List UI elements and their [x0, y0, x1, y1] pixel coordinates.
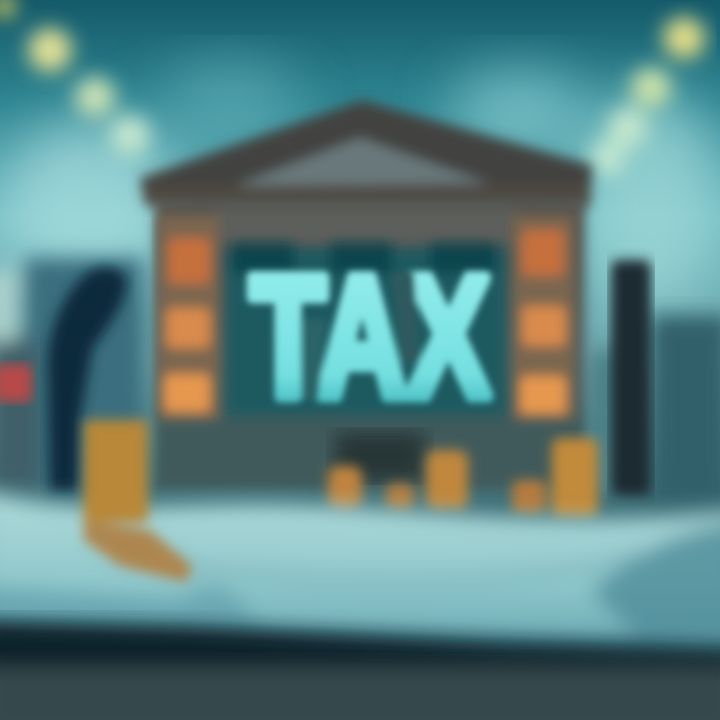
coin stacks: front of building	[328, 438, 598, 518]
background: sky glow	[0, 60, 720, 310]
skyline: left buildings	[0, 258, 144, 490]
skyline: right buildings	[590, 315, 720, 505]
right pillar with orange panels	[512, 215, 574, 420]
building roof pediment	[140, 100, 592, 206]
dark entrance behind sign	[226, 243, 506, 416]
lower building shadow	[335, 432, 425, 480]
string lights: left	[0, 0, 150, 156]
ground: pale document surface	[0, 490, 720, 645]
dark tower: right	[611, 260, 651, 496]
foreground: dark band	[0, 622, 720, 720]
left pillar with orange panels	[158, 215, 220, 420]
sign: TAX letters: TAX	[250, 241, 490, 433]
coin stack: left golden block	[84, 420, 192, 582]
figure: silhouette person	[48, 267, 126, 490]
building: tax office	[140, 100, 592, 490]
string lights: right	[590, 17, 705, 176]
icon: red sign at left	[0, 364, 32, 402]
building body	[155, 200, 585, 490]
